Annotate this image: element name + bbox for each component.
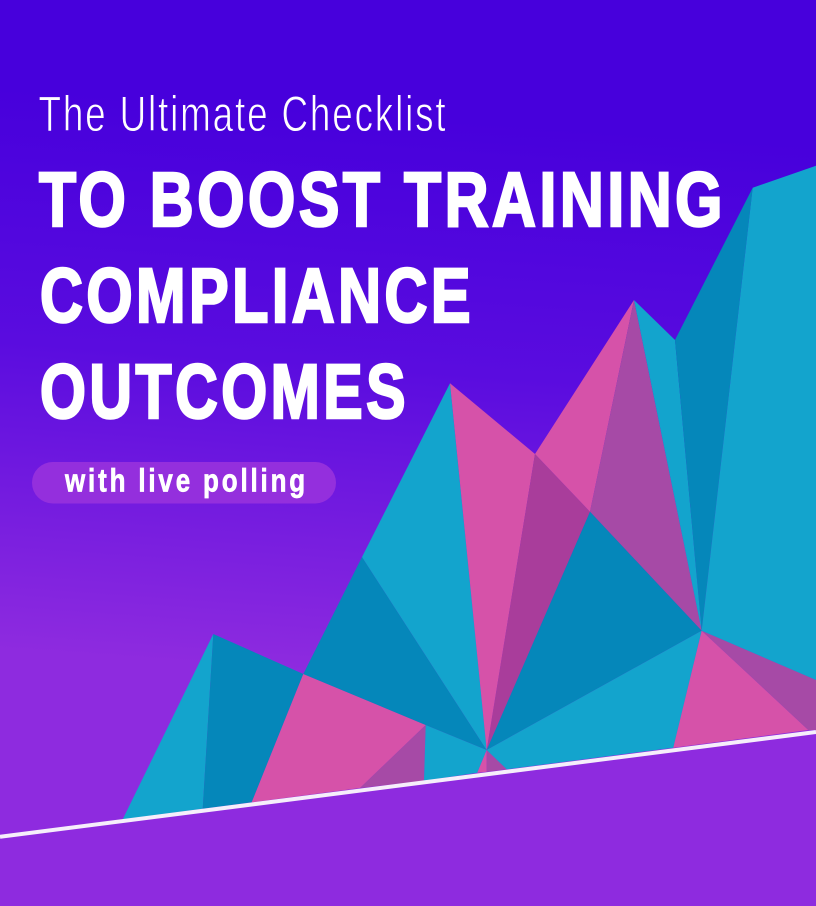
title: OUTCOMES: [40, 349, 409, 435]
title: [39, 157, 726, 435]
subtitle: The Ultimate Checklist: The Ultimate Checklist: [38, 86, 448, 142]
ground line: [0, 732, 816, 837]
title: COMPLIANCE: [40, 253, 474, 339]
low-poly mountain graphic: [123, 166, 816, 819]
badge: with live polling: with live polling: [64, 462, 308, 498]
ground fill: [0, 732, 816, 906]
